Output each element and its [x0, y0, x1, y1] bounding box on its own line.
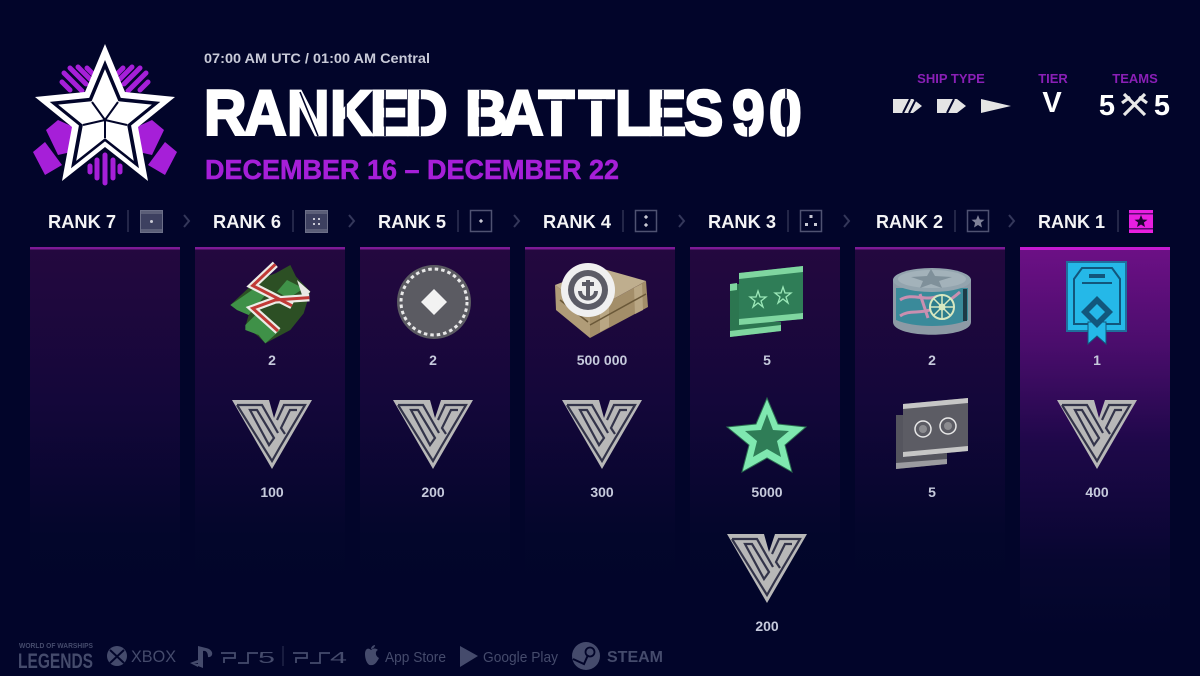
- rank 5 header: RANK 5: [378, 212, 446, 232]
- icon: green star: [727, 398, 806, 472]
- rank 1 header: RANK 1: [1038, 212, 1105, 232]
- icon: credits crate: [555, 263, 648, 338]
- icon: signal token: [397, 265, 471, 339]
- teams: 5: [1099, 90, 1115, 122]
- chevron: [844, 215, 849, 227]
- icon: green flag: [730, 266, 803, 337]
- title: RANKED BATTLES 90: [204, 78, 802, 150]
- logo: PS5 and PS4: 5: [258, 650, 275, 667]
- chevron: [514, 215, 519, 227]
- tier: TIER: [1038, 71, 1068, 86]
- value: 200: [421, 484, 445, 500]
- panel: rank 6: [195, 247, 345, 587]
- icon: V points: [232, 400, 312, 469]
- tier: V: [1042, 87, 1062, 119]
- logo: PS5 and PS4: [190, 646, 347, 668]
- rank 2 header: RANK 2: [876, 212, 943, 232]
- value: 500 000: [577, 352, 628, 368]
- panel: rank 2: [855, 247, 1005, 587]
- rank 3 header: [708, 210, 822, 232]
- icon: blue certificate: [1066, 261, 1127, 344]
- rank 1 header: [1038, 210, 1153, 233]
- ship type: SHIP TYPE: [917, 71, 985, 86]
- teams: [1099, 71, 1170, 122]
- value: 2: [429, 352, 437, 368]
- value: 400: [1085, 484, 1109, 500]
- rank 5 header: [378, 210, 492, 232]
- icon: V points: [393, 400, 473, 469]
- icon: container: [893, 268, 971, 335]
- chevron: [1009, 215, 1014, 227]
- icon: gray flag: [896, 398, 968, 469]
- value: 300: [590, 484, 614, 500]
- logo: World of Warships Legends: LEGENDS: [18, 650, 93, 673]
- logo: Steam: [572, 642, 663, 670]
- rank 4 header: RANK 4: [543, 212, 611, 232]
- logo: World of Warships Legends: WORLD OF WARSHIPS: [19, 641, 93, 650]
- rank 4 header: [543, 210, 656, 232]
- logo: Xbox: XBOX: [131, 647, 176, 666]
- logo: Xbox: [107, 646, 176, 666]
- icon: ship type cruiser class: [937, 99, 966, 113]
- logo: App Store: App Store: [385, 649, 446, 666]
- value: 100: [260, 484, 284, 500]
- rank 7 header: [48, 210, 162, 232]
- icon: ship type battleship class: [981, 99, 1011, 113]
- teams: 5: [1154, 90, 1170, 122]
- panel: rank 7: [30, 247, 180, 587]
- logo: App Store: [365, 645, 446, 666]
- rank 6 header: RANK 6: [213, 212, 281, 232]
- logo: Google Play: Google Play: [483, 649, 558, 666]
- icon: camouflage: [230, 264, 310, 343]
- value: 5: [928, 484, 936, 500]
- value: 2: [928, 352, 936, 368]
- value: 1: [1093, 352, 1101, 368]
- logo: Google Play: [460, 646, 558, 667]
- panel: rank 3: [690, 247, 840, 634]
- icon: V points: [1057, 400, 1137, 469]
- date range: DECEMBER 16 – DECEMBER 22: [205, 154, 619, 185]
- ship type: [893, 71, 1011, 113]
- chevron: [679, 215, 684, 227]
- footer: platform logos: [18, 641, 663, 673]
- chevron: [349, 215, 354, 227]
- value: 200: [755, 618, 779, 634]
- rank 3 header: RANK 3: [708, 212, 776, 232]
- icon: crossed swords: [1122, 94, 1147, 115]
- icon: ship type destroyer class: [893, 99, 922, 113]
- tier: [1038, 71, 1068, 119]
- value: 5: [763, 352, 771, 368]
- rank 7 header: RANK 7: [48, 212, 116, 232]
- value: 2: [268, 352, 276, 368]
- rank 6 header: [213, 210, 328, 232]
- schedule time: 07:00 AM UTC / 01:00 AM Central: [204, 50, 430, 66]
- icon: V points: [727, 534, 807, 603]
- value: 5000: [751, 484, 783, 500]
- panel: rank 1: [1020, 247, 1170, 640]
- icon: V points: [562, 400, 642, 469]
- logo: World of Warships Legends: [18, 641, 93, 673]
- panel: rank 4: [525, 247, 675, 587]
- logo: ranked star emblem: [33, 44, 177, 183]
- teams: TEAMS: [1112, 71, 1158, 86]
- logo: Steam: STEAM: [607, 649, 663, 666]
- rank 2 header: [876, 210, 988, 232]
- chevron: [184, 215, 189, 227]
- logo: PS5 and PS4: 4: [330, 650, 347, 667]
- panel: rank 5: [360, 247, 510, 587]
